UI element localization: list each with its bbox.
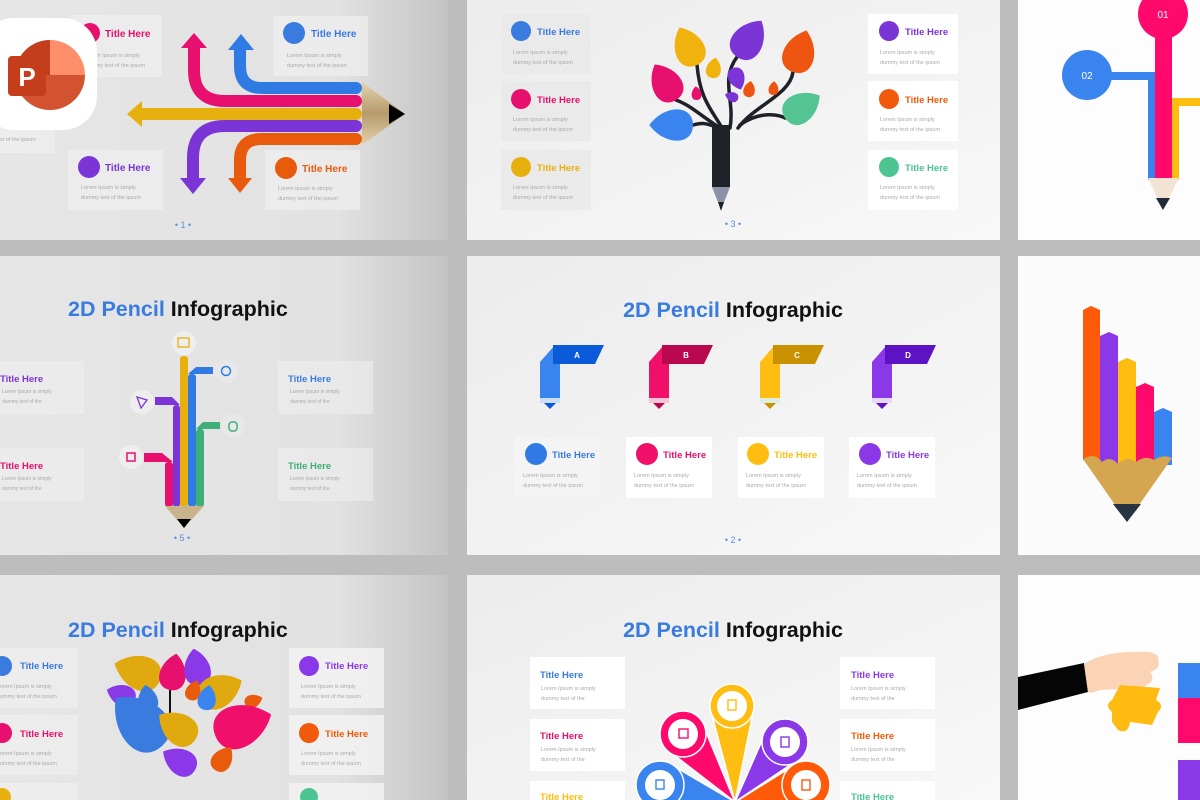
card: orange title: Lorem Ipsum is simply [278,186,333,192]
card: left 2: dummy text of the ipsum [513,127,573,133]
tree of leaves [99,646,279,781]
card: blue title: dummy text of the ipsum [287,63,347,69]
card: right 2: Title Here [905,95,948,106]
card: purple bl: Title Here [325,661,368,672]
page number 1: • 1 • [175,220,191,230]
card: pink title: Lorem Ipsum is simply [85,53,140,59]
slide: bottom middle fan [467,575,1000,800]
pencil C: C [794,351,800,360]
card: blue bm: Lorem Ipsum is simply [541,686,596,692]
pencil B [649,345,713,409]
card C: Title Here [774,450,817,461]
arrows pencil [127,33,405,194]
card: orange title: Title Here [302,164,348,175]
icon: powerpoint logo [0,18,97,130]
icon: powerpoint logo: P [18,62,36,92]
title slide 5: 2D Pencil Infographic [68,297,288,321]
card: pink bl: Title Here [20,729,63,740]
card D: Lorem Ipsum is simply [857,473,912,479]
card: green: Title Here [288,461,331,472]
card: orange bl: Lorem Ipsum is simply [301,751,356,757]
card B [626,437,712,498]
card: purple title: Title Here [105,163,151,174]
card: purple bl [289,648,384,708]
card: pink bm: Lorem Ipsum is simply [541,747,596,753]
card: pink: dummy text of the [2,486,42,492]
card: pink: Title Here [0,461,43,472]
pencil A: A [574,351,580,360]
page number 5: • 5 • [174,533,190,543]
card: orange bm: Lorem Ipsum is simply [851,747,906,753]
card: purple bm: dummy text of the [851,696,895,702]
card: green bm [840,781,935,800]
card: purple bl: dummy text of the ipsum [301,694,361,700]
card: left 3 [501,150,591,210]
slide: right top pencil 01 02: 02 [1081,71,1093,82]
card: pink: Lorem Ipsum is simply [2,476,52,482]
card: left 1 [501,14,591,74]
tree pencil illustration [642,12,828,211]
card: pink bl: orem Ipsum is simply [0,751,52,757]
card: purple bm: Lorem Ipsum is simply [851,686,906,692]
card: blue bl: Title Here [20,661,63,672]
card: blue: dummy text of the [290,399,330,405]
card: pink bm [530,719,625,771]
card B: dummy text of the ipsum [634,483,694,489]
pencil D [872,345,936,409]
card: left 2: Title Here [537,95,580,106]
card: pink bl: ummy text of the ipsum [0,761,57,767]
card: orange bl [289,715,384,775]
card: pink bm: Title Here [540,731,583,742]
slide 2: main pencil slide [467,256,1000,555]
card: purple: Title Here [0,374,43,385]
card: right 2 [868,81,958,141]
card B: Title Here [663,450,706,461]
card: blue title: Lorem Ipsum is simply [287,53,342,59]
slide: right bottom puzzle hand [1018,575,1200,800]
card partials bottom [0,783,384,800]
card: blue bm: dummy text of the [541,696,585,702]
card: orange bm: dummy text of the [851,757,895,763]
card: right 1: Lorem Ipsum is simply [880,50,935,56]
card C: dummy text of the ipsum [746,483,806,489]
card: purple: Lorem Ipsum is simply [2,389,52,395]
card: blue title: Title Here [311,29,357,40]
pencil D: D [905,351,911,360]
card: purple bl: Lorem Ipsum is simply [301,684,356,690]
card: left 2 [501,81,591,141]
card: partial left [0,128,55,153]
card: purple title: dummy text of the ipsum [81,195,141,201]
card: right 3: Lorem Ipsum is simply [880,185,935,191]
card D [849,437,935,498]
slide: right top pencil 01 02 [1018,0,1200,240]
card: orange bm: Title Here [851,731,894,742]
slide 3: tree pencil [467,0,1000,240]
card: left 3: Lorem Ipsum is simply [513,185,568,191]
card: right 1: Title Here [905,27,948,38]
card: blue bl: ummy text of the ipsum [0,694,57,700]
card: left 1: dummy text of the ipsum [513,60,573,66]
slide: bottom left tree [0,575,448,800]
slide 5: branch pencil [0,256,448,555]
card: pink bm: dummy text of the [541,757,585,763]
card: purple title [68,150,163,210]
card: pink title: dummy text of the ipsum [85,63,145,69]
card A: dummy text of the ipsum [523,483,583,489]
card: right 3: Title Here [905,163,948,174]
card: green [278,448,373,501]
card: pink title: Title Here [105,29,151,40]
card: blue: Title Here [288,374,331,385]
card A: Title Here [552,450,595,461]
card: left 3: dummy text of the ipsum [513,195,573,201]
card: purple bm: Title Here [851,670,894,681]
card: pink bl [0,715,78,775]
card: pink [0,448,84,501]
card: purple [0,361,84,414]
card: left 1: Lorem Ipsum is simply [513,50,568,56]
card: pink title [70,15,162,77]
card: left 3: Title Here [537,163,580,174]
card B: Lorem Ipsum is simply [634,473,689,479]
card: right 3: dummy text of the ipsum [880,195,940,201]
card: left 2: Lorem Ipsum is simply [513,117,568,123]
title slide 2: 2D Pencil Infographic [623,298,843,322]
card: right 2: Lorem Ipsum is simply [880,117,935,123]
pencil B: B [683,351,689,360]
card D: dummy text of the ipsum [857,483,917,489]
card: orange bl: dummy text of the ipsum [301,761,361,767]
card: orange bl: Title Here [325,729,368,740]
title bottom middle: 2D Pencil Infographic [623,618,843,642]
slide 1: arrows pencil [0,0,448,240]
card C: Lorem Ipsum is simply [746,473,801,479]
slide: right middle bar pencil [1018,256,1200,555]
pencil A [540,345,604,409]
card: blue title [273,16,368,76]
card C [738,437,824,498]
card: partial left: xt of the ipsum [0,137,36,143]
card: yellow bm [530,781,625,800]
page number 2: • 2 • [725,535,741,545]
card: right 1: dummy text of the ipsum [880,60,940,66]
card: right 3 [868,150,958,210]
card A [515,437,601,498]
card A: Lorem Ipsum is simply [523,473,578,479]
card: orange title: dummy text of the ipsum [278,196,338,202]
card: purple bm [840,657,935,709]
card: blue: Lorem Ipsum is simply [290,389,340,395]
card: left 1: Title Here [537,27,580,38]
card: blue bl [0,648,78,708]
card: green: dummy text of the [290,486,330,492]
card: green: Lorem Ipsum is simply [290,476,340,482]
card: orange bm [840,719,935,771]
card: right 1 [868,14,958,74]
card: purple title: Lorem Ipsum is simply [81,185,136,191]
card: blue bm: Title Here [540,670,583,681]
fan of petals [636,684,830,800]
pencil C [760,345,824,409]
card: blue bl: orem Ipsum is simply [0,684,52,690]
card: blue [278,361,373,414]
card: purple: dummy text of the [2,399,42,405]
card: blue bm [530,657,625,709]
branch pencil illustration [119,331,245,528]
slide: right top pencil 01 02: 01 [1157,10,1169,21]
card: orange title [265,150,360,210]
title bottom left: 2D Pencil Infographic [68,618,288,642]
page number 3: • 3 • [725,219,741,229]
card D: Title Here [886,450,929,461]
card: right 2: dummy text of the ipsum [880,127,940,133]
